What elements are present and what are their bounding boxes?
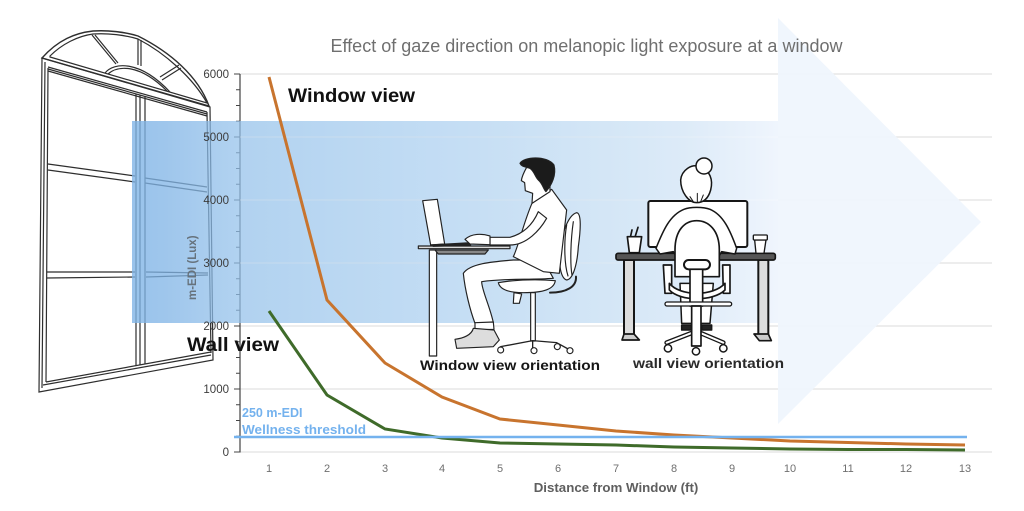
y axis labels (203, 69, 229, 459)
head and hair (520, 158, 555, 203)
x axis title: Distance from Window (ft) (534, 480, 698, 495)
office chair (663, 221, 732, 355)
icon: arched window illustration (39, 31, 213, 392)
x axis labels (266, 463, 971, 475)
y axis labels: 4000 (203, 195, 229, 207)
arrow shaft (132, 121, 778, 323)
icon: person seated facing window (418, 158, 580, 356)
desk (418, 246, 510, 356)
x axis labels: 2 (324, 463, 330, 475)
x axis labels: 9 (729, 463, 735, 475)
x axis labels: 12 (900, 463, 912, 475)
y axis labels: 0 (223, 447, 229, 459)
label: window view: Window view (288, 86, 415, 107)
coffee cup (753, 235, 767, 253)
label: wall view: Wall view (187, 335, 279, 356)
x axis labels: 7 (613, 463, 619, 475)
x axis labels: 6 (555, 463, 561, 475)
label: window view orientation: Window view orientation (420, 357, 600, 373)
x axis labels: 8 (671, 463, 677, 475)
pen cup (627, 227, 642, 253)
threshold line: 250 m-EDI (234, 436, 967, 438)
desk and monitor (616, 201, 775, 341)
label: wellness threshold: Wellness threshold (242, 423, 366, 437)
x axis labels: 1 (266, 463, 272, 475)
y axis title: m-EDI (Lux) (187, 235, 199, 300)
x axis labels: 13 (959, 463, 971, 475)
x axis labels: 4 (439, 463, 445, 475)
y axis labels: 3000 (203, 258, 229, 270)
series: window view curve (orange) (269, 77, 965, 445)
person back (656, 207, 737, 330)
chair (498, 213, 580, 354)
y axis labels: 6000 (203, 69, 229, 81)
x axis labels: 11 (842, 463, 854, 475)
x axis labels: 5 (497, 463, 503, 475)
label: wall view orientation: wall view orientation (632, 356, 784, 371)
icon: person seated facing wall (616, 158, 775, 355)
label: wellness threshold (242, 406, 366, 437)
chart gridlines and axes (234, 74, 992, 452)
chart title: Effect of gaze direction on melanopic light exposure at a window (331, 36, 843, 56)
torso and arm (465, 189, 567, 273)
arrow head (778, 18, 981, 424)
series: wall view curve (green) (269, 311, 965, 450)
y axis labels: 2000 (203, 321, 229, 333)
y axis labels: 1000 (203, 384, 229, 396)
faint gridlines through arrow shaft (240, 137, 778, 263)
x axis labels: 10 (784, 463, 796, 475)
head and hair bun (681, 158, 712, 203)
legs and shoes (455, 260, 553, 348)
y axis labels: 5000 (203, 132, 229, 144)
label: wellness threshold: 250 m-EDI (242, 406, 302, 420)
x axis labels: 3 (382, 463, 388, 475)
arrow: daylight falloff arrow (132, 18, 981, 424)
laptop (423, 199, 471, 246)
